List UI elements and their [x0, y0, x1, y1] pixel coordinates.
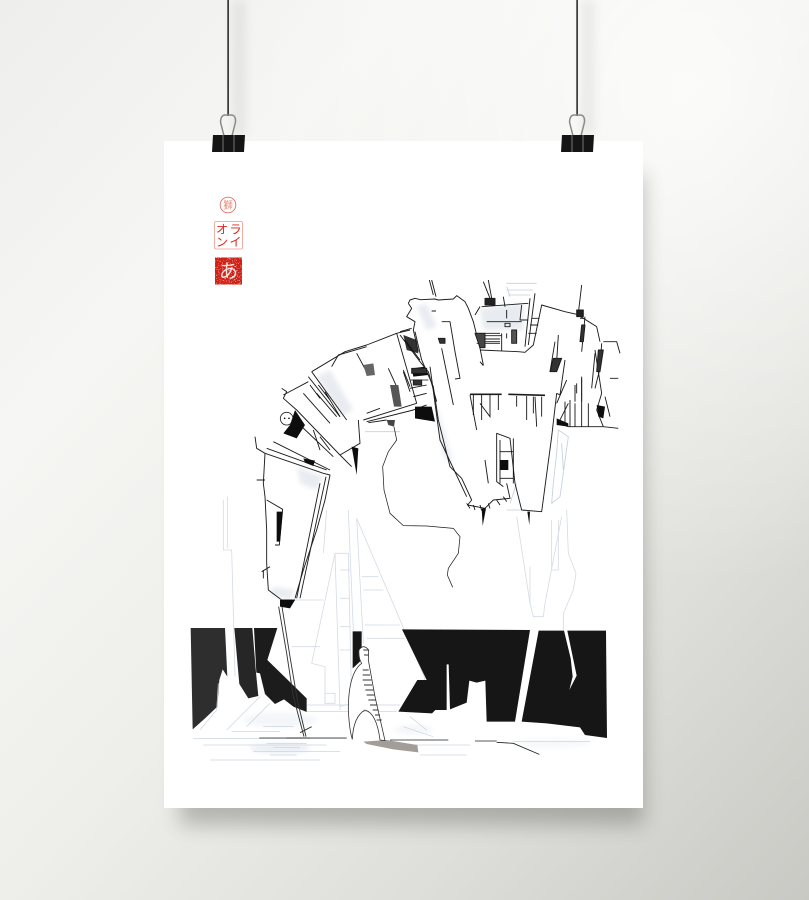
hull left jagged edge [407, 303, 418, 352]
stamp: katakana box: ラ [229, 222, 242, 236]
hull top edge [408, 296, 483, 365]
right hull dark blocks [550, 358, 562, 372]
hooded figure [348, 647, 385, 741]
black ink panel [191, 628, 607, 738]
ink block 6 [522, 631, 607, 738]
right hull lines [480, 285, 620, 403]
ground wash [243, 713, 590, 754]
stamp: round seal: 獅 [223, 200, 233, 212]
room hatching [475, 333, 485, 348]
slit block [438, 338, 445, 343]
red stamps [214, 197, 242, 284]
ink detail fills [277, 335, 605, 608]
binder clip right [561, 115, 594, 152]
faint background towers and legs [223, 497, 576, 710]
room window [512, 330, 517, 343]
long slit [432, 311, 460, 405]
main body outline [255, 330, 618, 600]
hull lower edges [415, 332, 510, 508]
ink block 3 [254, 628, 307, 712]
binder clip left [212, 115, 245, 152]
neck blocks [412, 368, 427, 385]
ink block 5 [398, 629, 530, 722]
stamp: katakana box [214, 222, 242, 249]
hanging wire left [227, 0, 229, 116]
cable [383, 427, 460, 587]
ground strokes [193, 683, 590, 760]
ground wash and figure [193, 607, 590, 760]
poster sheet [164, 141, 643, 808]
watercolor wash [270, 303, 523, 600]
ink block 1 [191, 628, 227, 729]
front leg [255, 437, 330, 598]
hatching details [310, 340, 610, 511]
leg left [279, 607, 312, 738]
head circle [280, 412, 293, 425]
stamp: katakana box: イ [229, 235, 242, 249]
ground ink lines [259, 738, 539, 754]
shadow under figure [363, 740, 418, 752]
poster shadow [180, 175, 644, 825]
antennas [429, 280, 539, 347]
blue under-drawing [365, 283, 568, 510]
hanging wire right [576, 0, 578, 116]
upper hull detail [400, 280, 620, 405]
central room outline [475, 303, 600, 352]
room lines [485, 310, 522, 351]
antenna base [485, 298, 495, 305]
neck side lines [400, 328, 437, 402]
creature sketch [255, 283, 618, 608]
wire shadows [232, 0, 595, 135]
stamp: katakana box: オ [216, 222, 228, 236]
stamp: katakana box: ン [216, 235, 228, 249]
neck section [312, 330, 417, 455]
ink block 2 [234, 628, 258, 698]
ink block 4 [353, 631, 362, 668]
stamp: solid red seal: あ [219, 262, 238, 282]
